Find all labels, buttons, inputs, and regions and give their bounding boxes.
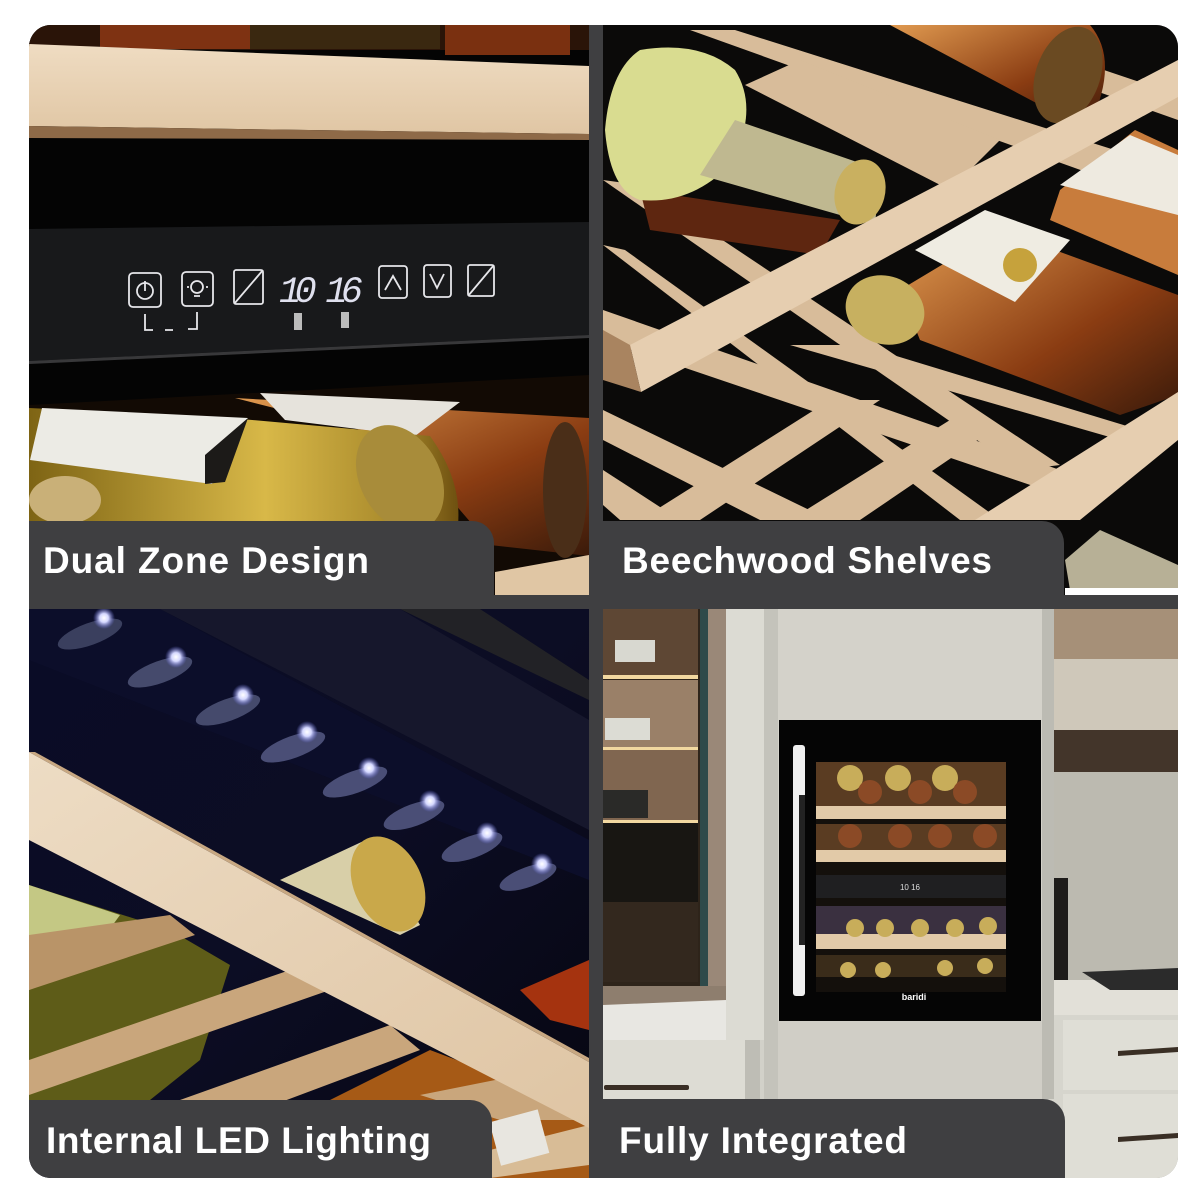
top bottles [29,25,589,55]
wine cooler: 10 16 [900,883,921,892]
wine cooler: baridi [902,992,926,1002]
tall columns [726,1000,760,1040]
lower bottles [29,375,589,595]
bottle lower right [1065,530,1178,590]
amber bottle top [890,25,1105,108]
label: internal led lighting: Internal LED Lighting [46,1120,431,1161]
label: fully integrated [603,1099,1065,1178]
panel: beechwood shelves [603,17,1178,595]
led lights [54,607,560,897]
left cabinet shelves [603,609,726,1006]
counter and drawers left [603,1000,760,1100]
control panel [29,222,589,364]
panel: internal led lighting [29,607,589,1178]
front shelf rail [630,60,1178,392]
main bottle [908,252,1178,415]
control panel: 10 16 [279,272,363,314]
right backsplash [1054,609,1178,1178]
label: internal led lighting [29,1100,492,1178]
label: fully integrated: Fully Integrated [619,1120,907,1161]
panel: fully integrated [603,609,1178,1178]
rear slats [603,30,1178,520]
wood slats [29,915,195,990]
white wine bottle [605,48,746,201]
wine cooler [779,720,1041,1021]
right bottle [1050,130,1178,275]
label: beechwood shelves: Beechwood Shelves [622,540,992,581]
wood shelf top [29,44,589,134]
bottle and cap [29,824,589,1178]
label: beechwood shelves [603,521,1178,609]
panel: dual zone design [29,25,589,595]
label: dual zone design: Dual Zone Design [43,540,369,581]
rear bottle [642,196,840,253]
label: dual zone design [29,521,589,609]
